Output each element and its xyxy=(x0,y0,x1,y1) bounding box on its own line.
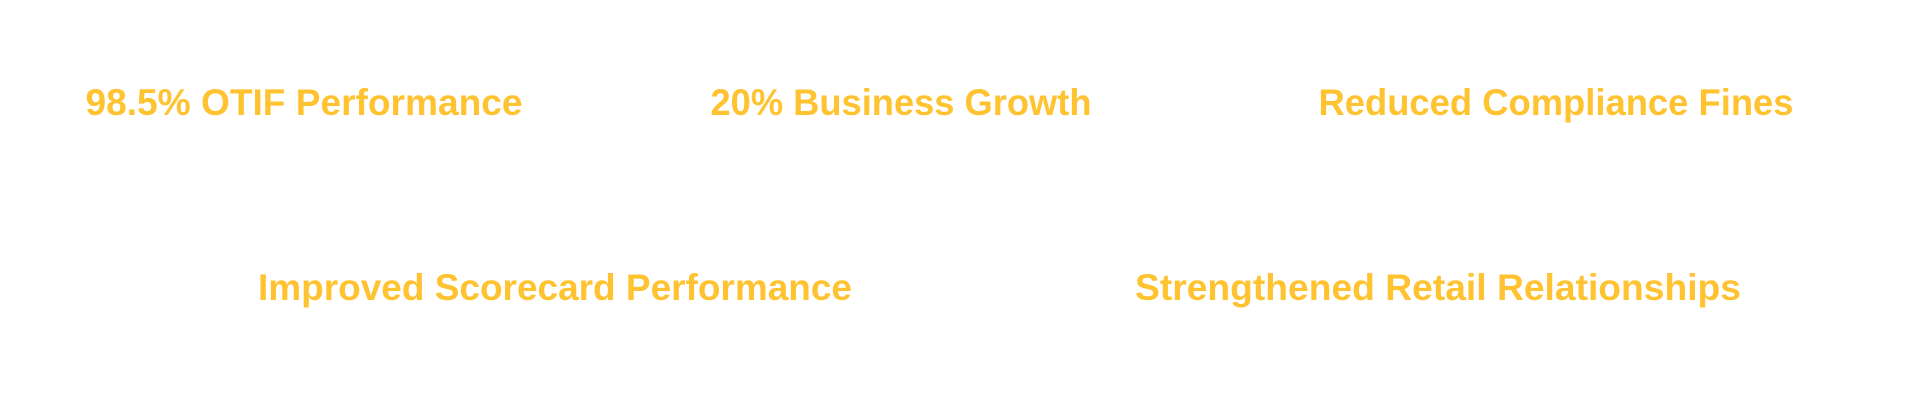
text: Strengthened Retail Relationships: Strengthened Retail Relationships xyxy=(1135,267,1741,308)
text: Reduced Compliance Fines: Reduced Compliance Fines xyxy=(1318,82,1794,123)
text: 98.5% OTIF Performance: 98.5% OTIF Performance xyxy=(86,82,522,123)
text: 20% Business Growth: 20% Business Growth xyxy=(710,82,1092,123)
text: Improved Scorecard Performance: Improved Scorecard Performance xyxy=(258,267,852,308)
